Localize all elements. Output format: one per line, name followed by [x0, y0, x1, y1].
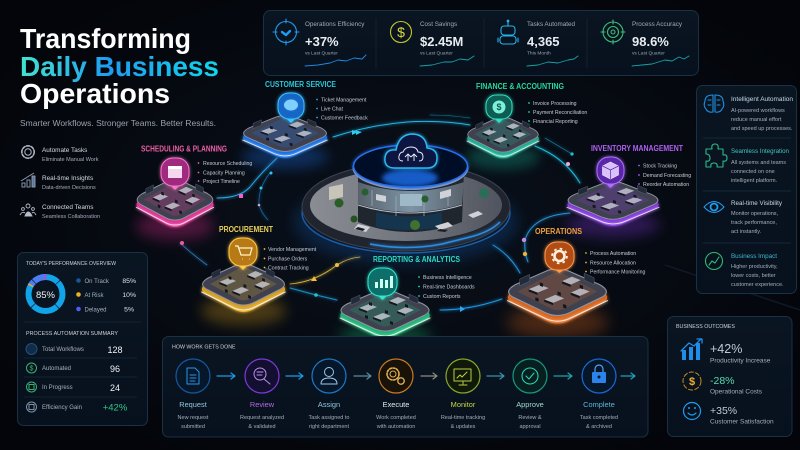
summary rows: 128 — [107, 345, 123, 355]
panel: performance overview — [18, 252, 148, 426]
heading: OPERATIONS — [535, 227, 583, 236]
capability: intelligent automation: AI-powered workflows — [731, 108, 785, 114]
icon: calendar — [161, 158, 189, 190]
capability: seamless integration: connected on one — [731, 169, 775, 175]
outcome: satisfaction: +35% — [710, 405, 737, 417]
feature: real-time insights: Data-driven Decisions — [42, 185, 96, 191]
heading: overview: TODAY'S PERFORMANCE OVERVIEW — [26, 261, 116, 267]
KPI: process accuracy: vs Last Quarter — [632, 50, 665, 56]
heading: outcomes: BUSINESS OUTCOMES — [676, 324, 735, 330]
capability: intelligent automation: and speed up processes. — [731, 126, 793, 132]
capability: real-time visibility: act instantly. — [731, 229, 762, 235]
department: inventory management — [566, 144, 691, 238]
platform — [135, 180, 215, 240]
capability: real-time visibility — [704, 200, 783, 235]
list: Financial Reporting — [533, 119, 578, 125]
list — [198, 161, 252, 185]
outcome: costs: -28% — [710, 375, 735, 387]
outcome: productivity: Productivity Increase — [710, 358, 771, 364]
step: monitor: Monitor — [451, 400, 476, 409]
capability: seamless integration: All systems and teams — [731, 160, 786, 166]
connectors between departments — [180, 115, 800, 310]
step: assign: Task assigned to — [309, 415, 349, 421]
KPI: operations efficiency: Operations Efficiency — [305, 21, 365, 28]
step: monitor: & updates — [451, 424, 476, 430]
icon: cart — [229, 238, 257, 270]
list: Performance Monitoring — [590, 270, 645, 276]
capability: business impact: Higher productivity, — [731, 264, 778, 270]
hub roof — [352, 145, 468, 190]
heading: FINANCE & ACCOUNTING — [476, 82, 564, 91]
heading: INVENTORY MANAGEMENT — [591, 144, 683, 153]
legend: On Track — [84, 279, 110, 285]
KPI: operations efficiency: vs Last Quarter — [305, 50, 338, 56]
icon: box — [597, 157, 624, 188]
outcome: costs: Operational Costs — [710, 388, 763, 396]
list: Ticket Management — [321, 98, 367, 104]
icon: chat bubble — [278, 93, 304, 123]
capability: business impact: lower costs, better — [731, 273, 776, 279]
KPI: operations efficiency: +37% — [305, 34, 339, 49]
list: Live Chat — [321, 106, 343, 112]
KPI: cost savings: vs Last Quarter — [420, 50, 453, 56]
title: Daily Business — [20, 51, 219, 82]
step: execute: with automation — [376, 424, 415, 430]
legend: 5% — [124, 306, 134, 314]
capability: intelligent automation: Intelligent Automation — [731, 96, 794, 103]
list: Stock Tracking — [643, 164, 677, 170]
list — [585, 251, 645, 276]
capability: seamless integration — [706, 144, 790, 184]
step: assign: Assign — [318, 400, 340, 409]
step: assign — [309, 359, 349, 430]
capability: business impact: customer experience. — [731, 282, 784, 288]
list: Reorder Automation — [643, 182, 689, 188]
central hub: cloud platform — [294, 134, 518, 264]
KPI: cost savings: $2.45M — [420, 34, 463, 49]
KPI: tasks automated: Tasks Automated — [527, 21, 575, 28]
step: request: Request — [179, 400, 207, 409]
donut chart: 85% — [36, 290, 56, 301]
list — [638, 164, 691, 188]
step: approve: Review & — [518, 415, 542, 421]
step: review: & validated — [248, 424, 276, 430]
icon: cloud upload — [385, 134, 437, 168]
capability: seamless integration: Seamless Integration — [731, 148, 790, 155]
title: Operations — [20, 78, 170, 109]
KPI: process accuracy: Process Accuracy — [632, 21, 683, 28]
department: reporting and analytics — [339, 255, 475, 351]
feature: automate tasks: Automate Tasks — [42, 147, 87, 154]
title: Transforming — [20, 23, 191, 54]
heading: REPORTING & ANALYTICS — [373, 255, 461, 264]
step: review — [240, 359, 284, 430]
step: monitor: Real-time tracking — [441, 415, 485, 421]
step: request: submitted — [181, 424, 205, 430]
heading: PROCUREMENT — [219, 225, 273, 234]
department: procurement — [201, 225, 317, 325]
list: Contract Tracking — [268, 266, 309, 272]
panel: business outcomes — [668, 316, 792, 436]
platform — [201, 264, 286, 325]
department: scheduling and planning — [135, 144, 252, 240]
capability: business impact: Business Impact — [731, 253, 777, 260]
arrow — [354, 373, 371, 379]
hub base — [294, 163, 518, 264]
outcome: productivity: +42% — [710, 342, 742, 356]
arrow — [621, 373, 635, 379]
legend — [76, 278, 136, 314]
list: Payment Reconciliation — [533, 110, 587, 116]
step: execute: Execute — [383, 400, 409, 409]
platform — [242, 115, 328, 169]
feature: real-time insights: Real-time Insights — [42, 175, 93, 182]
arrow — [217, 373, 235, 379]
summary rows: Efficiency Gain — [42, 405, 82, 411]
list: Process Automation — [590, 251, 636, 257]
list: Capacity Planning — [203, 170, 245, 176]
donut chart — [21, 270, 70, 318]
legend: At Risk — [84, 293, 105, 299]
legend: Delayed — [84, 308, 107, 314]
step: complete — [580, 359, 618, 430]
KPI: tasks automated: This Month — [527, 50, 551, 56]
arrow — [554, 373, 572, 379]
heading: SCHEDULING & PLANNING — [141, 144, 227, 154]
department: finance and accounting — [466, 82, 587, 169]
icon: dollar coin: $ — [496, 102, 502, 112]
summary rows: $ — [30, 366, 34, 372]
capability: real-time visibility: Monitor operations, — [731, 211, 779, 217]
KPI: cost savings: Cost Savings — [420, 21, 457, 28]
heading: summary: PROCESS AUTOMATION SUMMARY — [26, 331, 118, 337]
hub building — [358, 170, 464, 232]
step: monitor — [441, 359, 485, 430]
step: approve — [513, 359, 547, 430]
summary rows — [26, 344, 128, 414]
step: execute: Work completed — [376, 415, 416, 421]
step: complete: & archived — [586, 424, 612, 430]
step: assign: right department — [309, 424, 349, 430]
icon: gear — [22, 146, 34, 158]
outcome: productivity — [681, 339, 771, 364]
KPI: cost savings: $ — [397, 24, 405, 40]
KPI: operations efficiency — [273, 19, 366, 66]
outcome: satisfaction — [684, 402, 774, 426]
step: review: Request analyzed — [240, 415, 284, 421]
platform — [339, 290, 431, 351]
feature: connected teams: Connected Teams — [42, 204, 93, 211]
step: approve: approval — [519, 424, 541, 430]
list: Invoice Processing — [533, 101, 577, 107]
summary rows: Total Workflows — [42, 347, 84, 353]
icon: bars — [368, 268, 397, 300]
list: Project Timeline — [203, 179, 240, 185]
feature: real-time insights — [42, 175, 96, 191]
platform — [566, 182, 660, 238]
step: review: Review — [250, 400, 275, 409]
list: Resource Scheduling — [203, 161, 252, 167]
icon: bar insights — [21, 173, 35, 187]
outcome: costs: $ — [689, 376, 695, 388]
step: complete: Task completed — [580, 415, 618, 421]
panel: capabilities — [696, 86, 796, 294]
platform — [466, 117, 540, 169]
arrow — [421, 373, 437, 379]
subtitle: Smarter Workflows. Stronger Teams. Better Results. — [20, 118, 216, 128]
list: Demand Forecasting — [643, 173, 691, 179]
feature: connected teams — [42, 204, 100, 220]
step: request — [176, 359, 210, 430]
KPI: process accuracy — [601, 20, 689, 66]
icon: cog — [545, 242, 574, 273]
list — [316, 98, 368, 122]
KPI: process accuracy: 98.6% — [632, 34, 669, 49]
list: Purchase Orders — [268, 256, 308, 262]
feature: connected teams: Seamless Collaboration — [42, 214, 100, 220]
outcome: costs — [683, 372, 763, 396]
department: customer service — [242, 80, 368, 169]
list: Real-time Dashboards — [423, 284, 475, 290]
arrow — [487, 373, 504, 379]
summary rows: 24 — [110, 383, 120, 393]
hub offices and trees — [329, 184, 489, 232]
feature: automate tasks: Eliminate Manual Work — [42, 157, 99, 163]
platform — [506, 269, 609, 338]
connector nodes — [180, 130, 574, 312]
KPI: cost savings — [390, 21, 474, 66]
arrow — [286, 373, 303, 379]
summary rows: +42% — [103, 402, 128, 414]
capability: intelligent automation: reduce manual effort — [731, 117, 782, 123]
step: execute — [376, 359, 416, 430]
KPI: tasks automated: 4,365 — [527, 34, 560, 49]
summary rows: 96 — [110, 364, 120, 374]
list — [264, 247, 317, 272]
heading: process: HOW WORK GETS DONE — [172, 344, 236, 350]
capability: real-time visibility: Real-time Visibility — [731, 200, 783, 207]
legend: 85% — [122, 278, 136, 285]
icon: team — [20, 204, 36, 216]
summary rows: In Progress — [42, 385, 73, 391]
panel: KPI strip — [264, 10, 698, 76]
department: operations — [506, 227, 645, 338]
list — [528, 101, 587, 125]
capability: business impact — [706, 252, 784, 288]
summary rows: Automated — [42, 366, 71, 372]
title — [20, 23, 219, 109]
legend: 10% — [122, 292, 136, 299]
list: Resource Allocation — [590, 260, 636, 266]
capability: real-time visibility: track performance, — [731, 220, 777, 226]
feature list — [20, 146, 100, 220]
list: Business Intelligence — [423, 275, 472, 281]
KPI: tasks automated — [498, 20, 578, 66]
panel: how work gets done — [162, 336, 648, 437]
list: Vendor Management — [268, 247, 317, 253]
step: approve: Approve — [516, 400, 544, 409]
list: Custom Reports — [423, 294, 461, 300]
outcome: satisfaction: Customer Satisfaction — [710, 418, 774, 426]
capability: intelligent automation — [704, 95, 794, 132]
step: request: New request — [178, 415, 209, 421]
capability: seamless integration: intelligent platform. — [731, 178, 778, 184]
step: complete: Complete — [583, 400, 615, 409]
heading: CUSTOMER SERVICE — [265, 80, 337, 89]
list: Customer Feedback — [321, 116, 368, 122]
list — [418, 275, 475, 300]
feature: automate tasks — [42, 147, 99, 163]
